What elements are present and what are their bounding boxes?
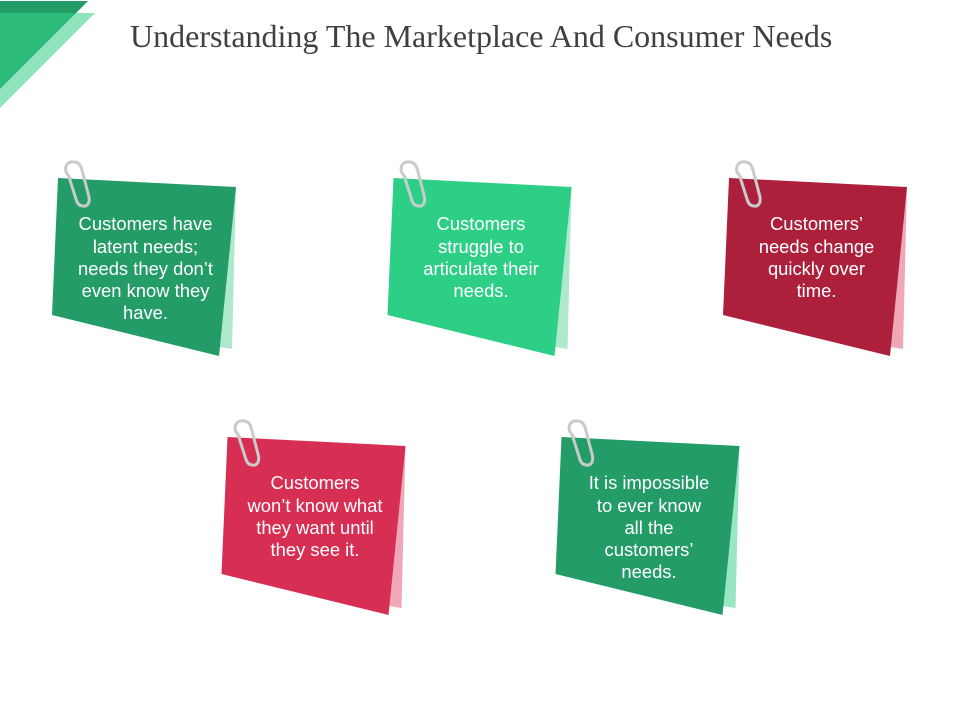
text: impossible to know: It is impossible: [589, 472, 709, 493]
icon: paperclip: [737, 162, 760, 206]
icon: paperclip: [401, 162, 425, 206]
text: struggle to articulate: needs.: [453, 280, 509, 301]
text: until they see it: Customers: [271, 472, 359, 493]
text: impossible to know: needs.: [621, 561, 677, 582]
text: needs change: Customers’: [770, 213, 863, 234]
text: latent needs: have.: [123, 302, 168, 323]
text: impossible to know: customers’: [605, 539, 693, 560]
text: latent needs: needs they don’t: [78, 258, 213, 279]
text: latent needs: latent needs;: [93, 236, 198, 257]
text: needs change: needs change: [759, 236, 874, 257]
text: needs change: quickly over: [768, 258, 865, 279]
text: needs change: [759, 213, 874, 301]
panel: note until they see it: [222, 421, 406, 615]
text: impossible to know: to ever know: [597, 495, 702, 516]
text: impossible to know: all the: [624, 517, 674, 538]
panel: note struggle to articulate: [388, 162, 572, 356]
text: impossible to know: [589, 472, 709, 582]
text: latent needs: [78, 213, 213, 323]
text: struggle to articulate: [423, 213, 539, 301]
panel: note impossible to know: [556, 421, 740, 615]
text: struggle to articulate: struggle to: [438, 236, 524, 257]
text: until they see it: they see it.: [271, 539, 359, 560]
text: until they see it: won’t know what: [247, 495, 382, 516]
title: Understanding The Marketplace And Consumer Needs: [130, 18, 832, 54]
icon: paperclip: [569, 421, 593, 465]
text: struggle to articulate: Customers: [437, 213, 525, 234]
panel: note latent needs: [52, 162, 236, 356]
text: latent needs: Customers have: [79, 213, 212, 234]
icon: paperclip: [66, 162, 89, 206]
text: needs change: time.: [797, 280, 836, 301]
panel: note needs change: [723, 162, 907, 356]
icon: paperclip: [235, 421, 259, 465]
text: latent needs: even know they: [82, 280, 210, 301]
text: until they see it: [247, 472, 382, 560]
icon: corner triangles: [0, 1, 95, 108]
text: struggle to articulate: articulate their: [423, 258, 539, 279]
text: until they see it: they want until: [256, 517, 374, 538]
